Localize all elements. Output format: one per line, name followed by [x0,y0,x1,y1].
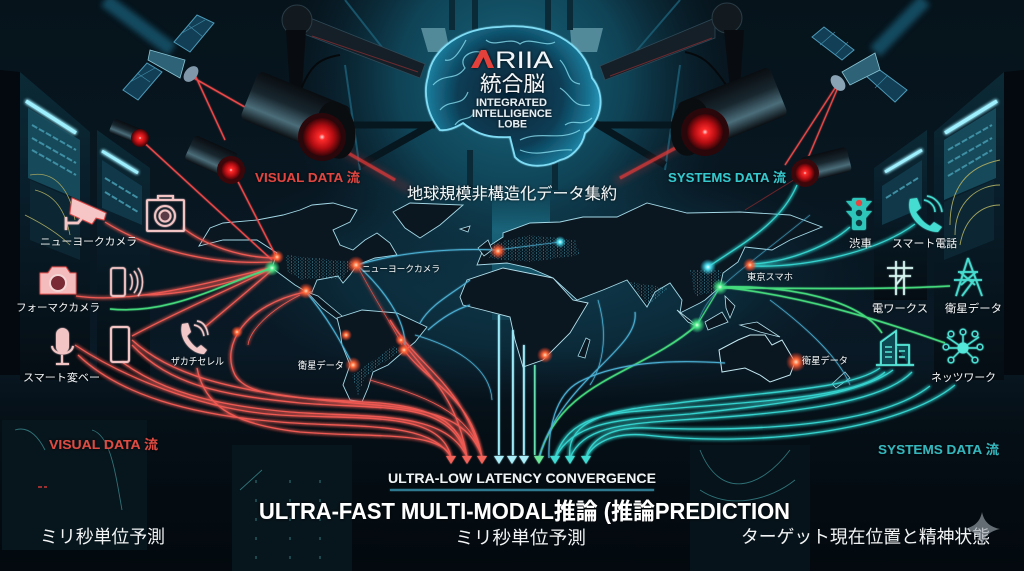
icon: utility pole [887,261,913,295]
label: network: ネッツワーク [931,371,996,384]
icon: small left cameras [109,118,245,184]
icon: network nodes [943,329,983,363]
label: integrated: INTEGRATED [476,97,547,109]
vertical light beams behind the map [492,190,550,320]
continent: central america [307,292,342,320]
label: lobe: LOBE [498,118,527,130]
icon: traffic light [846,198,872,230]
icon: security camera [66,198,106,230]
caption: left: ミリ秒単位予測 [40,527,165,547]
label: traffic: 渋車 [849,236,872,250]
label: visual data bottom: VISUAL DATA 流 [49,437,158,452]
world map [199,203,850,402]
heading: main title: ULTRA-FAST MULTI-MODAL推論 (推論PREDICTION [259,498,790,524]
caption: center: ミリ秒単位予測 [455,528,586,548]
icon: right satellite [812,0,925,102]
label: forma camera: フォーマクカメラ [16,302,100,314]
icon: phone call right [909,196,942,232]
panel: lower server racks [2,420,810,571]
label: smart phone: スマート電話 [892,237,957,250]
label: satellite data south america: 衛星データ [298,359,344,372]
green data streams [110,268,950,458]
label: decachi cell: ザカチセレル [171,356,224,368]
label: left camera: ニューヨークカメラ [40,236,137,248]
continent: madagascar and new zealand [578,338,850,388]
icon: left satellite [105,0,214,100]
label: smart speaker: スマート変ベー [23,371,100,384]
vertical convergence beams [498,315,536,455]
label: systems data bottom: SYSTEMS DATA 流 [878,442,999,457]
label: power works: 電ワークス [872,302,928,315]
continent: north america [199,203,397,292]
panel: left server racks [20,72,150,380]
icon: large left camera [240,5,425,162]
icon: office buildings [876,331,914,365]
continent: south america [337,310,427,402]
red data streams [75,222,482,457]
continent: eurasia [477,203,822,313]
label: satellite data australia: 衛星データ [802,355,848,367]
icon: camera outline [147,196,184,231]
icon: large right camera [600,3,788,159]
label: tokyo smartphone: 東京スマホ [747,271,793,282]
label: map camera: ニューヨークカメラ [362,264,440,274]
map hotspots [231,236,806,373]
labels: small annotations [16,236,1002,384]
brand: ARIIA: RIIA [495,47,553,74]
icon: smartphone with signal [111,268,142,296]
label: satellite data right: 衛星データ [945,301,1002,315]
blue data streams [306,215,850,458]
label: intelligence: INTELLIGENCE [472,108,552,120]
heading: convergence: ULTRA-LOW LATENCY CONVERGENCE [388,470,656,486]
label: 統合脳: 統合脳 [480,73,545,96]
icon: microphone [52,329,73,364]
icon: phone call left [181,321,208,354]
divider glow [390,489,654,491]
icon: photo camera [40,267,76,294]
brain [426,26,600,166]
icon: small right camera [791,147,852,187]
continent: greenland [393,203,463,238]
convergence arrowheads [446,456,591,464]
heading: global aggregation: 地球規模非構造化データ集約 [407,184,617,203]
teal data streams [555,185,955,458]
labels: stream headings [49,170,999,457]
city light clusters [285,235,722,395]
light beams from the cameras [139,75,839,260]
continent: africa [460,268,588,367]
label: systems data top: SYSTEMS DATA 流 [668,170,786,185]
panel: right server racks [874,72,1004,380]
label: visual data top: VISUAL DATA 流 [255,170,360,185]
continent: australia [719,335,795,382]
icon: sparkle star [964,512,1000,546]
continent: indonesia and islands [460,226,780,337]
brain label [471,47,553,130]
caption: right: ターゲット現在位置と精神状態 [741,527,990,547]
icon: smartphone [111,327,129,362]
icon: transmission tower [954,258,982,296]
